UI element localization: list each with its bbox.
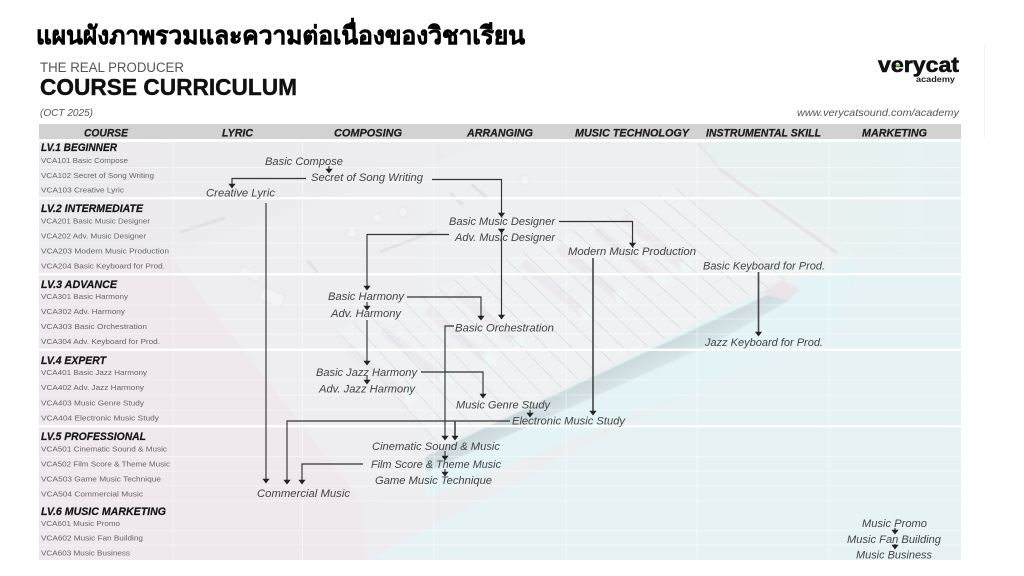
course list: level 4: VCA401 Basic Jazz Harmony (41, 368, 147, 377)
course nodes: Game Music Technique (375, 475, 492, 487)
table header row: LYRIC (222, 128, 254, 140)
course list: level 1: VCA102 Secret of Song Writing (41, 171, 154, 180)
course list: level 2: VCA202 Adv. Music Designer (41, 232, 147, 240)
table header row: COURSE (84, 128, 129, 140)
course nodes: Music Business (856, 550, 932, 562)
course nodes: Jazz Keyboard for Prod. (704, 337, 823, 349)
course list: level 5: VCA503 Game Music Technique (41, 474, 161, 484)
white gaps between levels (39, 197, 961, 427)
course list: level 3: LV.3 ADVANCE (41, 279, 118, 291)
table header row: ARRANGING (466, 128, 533, 140)
heading: course curriculum: COURSE CURRICULUM (40, 74, 297, 100)
course nodes: Cinematic Sound & Music (372, 441, 500, 453)
course list: level 6: VCA601 Music Promo (41, 519, 120, 528)
table header row: COMPOSING (334, 128, 402, 140)
course nodes: Music Fan Building (847, 534, 942, 546)
course nodes: Adv. Jazz Harmony (318, 384, 417, 396)
course nodes: Secret of Song Writing (311, 172, 424, 184)
course nodes: Adv. Music Designer (454, 232, 556, 244)
date: (OCT 2025) (40, 108, 93, 119)
course list: level 3: VCA304 Adv. Keyboard for Prod. (41, 337, 160, 346)
course nodes: Music Genre Study (456, 400, 551, 412)
course nodes: Creative Lyric (206, 188, 276, 200)
course list: level 5: VCA502 Film Score & Theme Music (41, 460, 170, 468)
course list: level 4: VCA402 Adv. Jazz Harmony (41, 383, 144, 392)
course list: level 4: LV.4 EXPERT (41, 355, 107, 367)
course nodes: Adv. Harmony (330, 308, 403, 320)
course list: level 4: VCA404 Electronic Music Study (41, 414, 159, 422)
table header row (39, 124, 961, 140)
logo: verycat academy: verycat (878, 54, 959, 77)
course nodes: Music Promo (862, 518, 927, 530)
course nodes: Basic Harmony (328, 291, 406, 303)
course nodes: Commercial Music (257, 488, 350, 500)
course list: level 2: LV.2 INTERMEDIATE (41, 203, 144, 215)
logo: verycat academy: academy (916, 75, 956, 84)
course list: level 5: VCA501 Cinematic Sound & Music (41, 444, 167, 454)
course list: level 2: VCA204 Basic Keyboard for Prod. (41, 262, 165, 270)
course nodes: Electronic Music Study (512, 416, 627, 428)
course nodes: Basic Orchestration (455, 322, 554, 334)
course list: level 3 (41, 279, 160, 346)
course nodes (206, 156, 942, 562)
course nodes: Basic Compose (265, 156, 343, 168)
course list: level 1 (41, 142, 154, 194)
website: www.verycatsound.com/academy (797, 107, 960, 119)
course list: level 4: VCA403 Music Genre Study (41, 398, 144, 408)
course list: level 5 (41, 431, 170, 498)
title: แผนผังภาพรวมและความต่อเนื่องของวิชาเรียน (36, 18, 525, 50)
flow arrows (229, 166, 898, 549)
subtitle: the real producer: THE REAL PRODUCER (40, 60, 184, 75)
course list: level 6 (41, 506, 166, 558)
course list: level 6: LV.6 MUSIC MARKETING (41, 506, 166, 518)
table header row: MARKETING (862, 128, 927, 140)
course nodes: Film Score & Theme Music (371, 459, 501, 471)
table header row: MUSIC TECHNOLOGY (575, 128, 691, 140)
course list: level 3: VCA302 Adv. Harmony (41, 307, 125, 316)
course list: level 1: VCA103 Creative Lyric (41, 186, 124, 194)
course nodes: Modern Music Production (568, 246, 696, 258)
course list: level 4 (41, 355, 159, 422)
table header row: INSTRUMENTAL SKILL (706, 128, 821, 140)
course nodes: Basic Music Designer (449, 216, 556, 228)
course list: level 5: VCA504 Commercial Music (41, 490, 143, 498)
course list: level 2 (41, 203, 169, 270)
course list: level 6: VCA602 Music Fan Building (41, 534, 143, 542)
course list: level 1: VCA101 Basic Compose (41, 156, 128, 165)
logo: verycat academy (878, 54, 959, 84)
course list: level 3: VCA303 Basic Orchestration (41, 322, 147, 331)
table background artwork: keyboard (39, 142, 961, 560)
course nodes: Basic Jazz Harmony (316, 367, 418, 379)
grid lines (39, 142, 961, 560)
course list: level 2: VCA203 Modern Music Production (41, 246, 169, 256)
course list: level 2: VCA201 Basic Music Designer (41, 216, 151, 226)
course nodes: Basic Keyboard for Prod. (703, 260, 825, 272)
course list: level 5: LV.5 PROFESSIONAL (41, 431, 146, 443)
course list: level 3: VCA301 Basic Harmony (41, 292, 128, 301)
course list: level 6: VCA603 Music Business (41, 548, 130, 558)
course list: level 1: LV.1 BEGINNER (41, 142, 117, 154)
